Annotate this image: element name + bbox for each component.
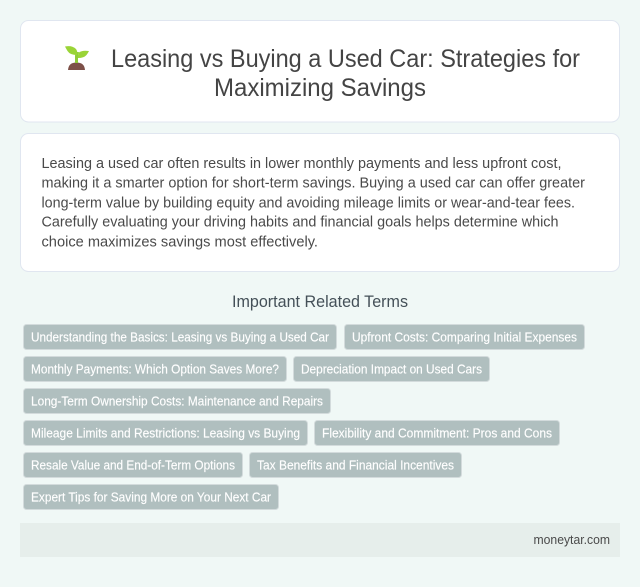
- paragraph text: [42, 155, 585, 250]
- icon: seedling: [65, 46, 89, 70]
- title text: Maximizing Savings: [214, 74, 426, 102]
- tag: depreciation impact: [294, 356, 490, 382]
- panel: title card: [20, 20, 620, 122]
- tag: upfront costs: Upfront Costs: Comparing Initial Expenses: [352, 330, 577, 344]
- tag: upfront costs: [344, 324, 584, 350]
- tag: understanding the basics: Understanding the Basics: Leasing vs Buying a Used Car: [31, 330, 330, 344]
- heading: important related terms: Important Related Terms: [232, 293, 408, 311]
- tag: resale value: Resale Value and End-of-Term Options: [31, 458, 235, 472]
- tag: expert tips: Expert Tips for Saving More on Your Next Car: [31, 490, 272, 504]
- panel: summary paragraph: [20, 134, 620, 272]
- tag: flexibility and commitment: [314, 420, 560, 446]
- tag list: [24, 324, 584, 510]
- paragraph text: making it a smarter option for short-term savings. Buying a used car can offer greater: [42, 174, 585, 192]
- title text: [111, 45, 580, 102]
- paragraph text: Leasing a used car often results in lower monthly payments and less upfront cost,: [42, 155, 562, 172]
- footer bar: [20, 523, 620, 557]
- paragraph text: long-term value by building equity and avoiding mileage limits or wear-and-tear fees.: [42, 194, 575, 212]
- footer source: moneytar.com: [534, 532, 610, 547]
- tag: understanding the basics: [24, 324, 336, 350]
- tag: monthly payments: Monthly Payments: Which Option Saves More?: [31, 362, 279, 376]
- tag: long-term ownership costs: [24, 388, 330, 414]
- tag: long-term ownership costs: Long-Term Ownership Costs: Maintenance and Repairs: [31, 394, 323, 408]
- paragraph text: choice maximizes savings most effectively.: [42, 234, 318, 250]
- tag: depreciation impact: Depreciation Impact on Used Cars: [301, 362, 482, 376]
- title text: Leasing vs Buying a Used Car: Strategies for: [111, 45, 580, 73]
- tag: resale value: [24, 452, 242, 478]
- tag: monthly payments: [24, 356, 286, 382]
- tag: tax benefits: Tax Benefits and Financial Incentives: [257, 458, 454, 472]
- tag: expert tips: [24, 484, 278, 510]
- tag: flexibility and commitment: Flexibility and Commitment: Pros and Cons: [322, 426, 552, 440]
- paragraph text: Carefully evaluating your driving habits and financial goals helps determine which: [42, 214, 558, 230]
- tag: mileage limits: Mileage Limits and Restrictions: Leasing vs Buying: [31, 426, 300, 440]
- tag: mileage limits: [24, 420, 308, 446]
- tag: tax benefits: [250, 452, 462, 478]
